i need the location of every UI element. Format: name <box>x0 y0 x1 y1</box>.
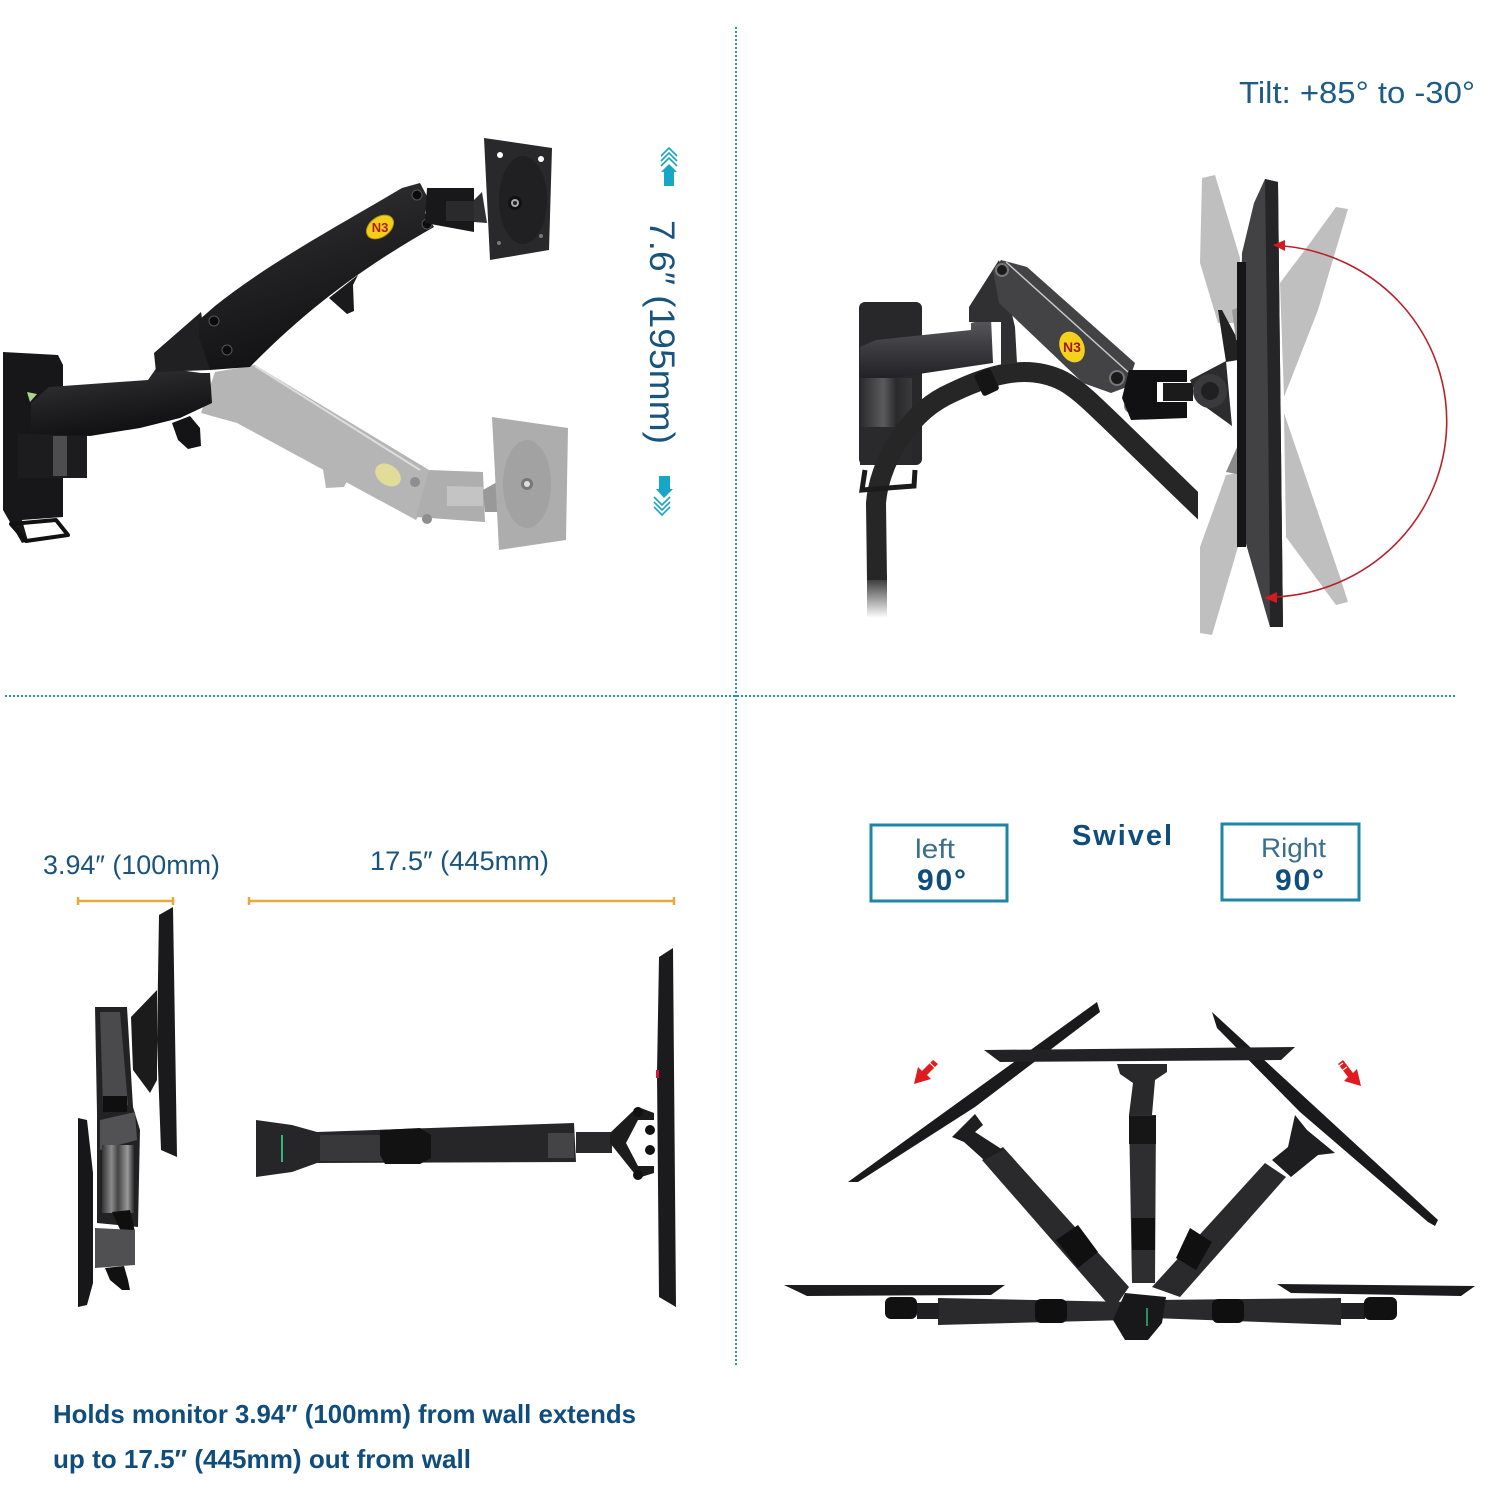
height arrow down <box>654 476 673 515</box>
lower arm <box>31 367 212 436</box>
panel: tilt <box>859 75 1475 635</box>
retracted monitor <box>157 907 177 1157</box>
support post <box>18 434 87 478</box>
arm screws <box>209 190 432 355</box>
extended pin <box>576 1132 612 1153</box>
bottom caption: up to 17.5″ (445mm) out from wall <box>53 1444 471 1474</box>
extended arm <box>256 1120 576 1177</box>
height arrow up <box>661 148 677 186</box>
retracted knob <box>105 1266 130 1290</box>
logo badge <box>1054 327 1090 367</box>
dimension line extension <box>249 897 674 905</box>
right swivel arrow <box>1336 1060 1361 1086</box>
strap <box>862 470 915 490</box>
arm tab <box>329 275 358 314</box>
elbow joint <box>969 260 1017 365</box>
left box <box>871 825 1007 901</box>
elbow joint <box>154 312 210 372</box>
panel: swivel <box>784 820 1475 1340</box>
right box <box>1222 824 1359 900</box>
adjustment knob <box>172 416 201 449</box>
retracted wall plate <box>78 1118 93 1307</box>
left swivel arrow <box>914 1059 940 1084</box>
bottom-left arm <box>885 1297 1129 1325</box>
wall plate <box>3 352 63 543</box>
logo badge: N3 <box>372 220 388 235</box>
bottom caption <box>53 1399 636 1474</box>
horizontal divider <box>5 695 1455 697</box>
monitor bracket <box>425 188 487 232</box>
retracted arm <box>95 1007 140 1238</box>
retracted bracket <box>131 990 157 1093</box>
forearm <box>993 260 1135 393</box>
red indicator <box>656 1070 659 1078</box>
dimension line wall <box>78 897 173 905</box>
swivel title: Swivel <box>1072 820 1172 852</box>
vertical divider <box>735 27 737 1365</box>
wall plate <box>859 302 922 465</box>
bracket <box>1122 370 1193 420</box>
base mount <box>1113 1293 1166 1340</box>
panel: extension <box>43 846 676 1474</box>
dimension label extension: 17.5″ (445mm) <box>370 846 549 876</box>
green indicator <box>27 392 37 402</box>
forearm screws <box>996 264 1137 412</box>
VESA plate <box>484 138 552 260</box>
bottom-right monitor <box>1277 1284 1475 1296</box>
ghost arm: lower position <box>201 365 568 550</box>
tilt arc <box>1275 246 1447 597</box>
logo badge: N3 <box>1063 339 1081 355</box>
ball joint <box>1190 361 1232 426</box>
VESA bracket <box>1218 306 1242 475</box>
monitor <box>1237 179 1283 627</box>
bottom caption: Holds monitor 3.94″ (100mm) from wall extends <box>53 1399 636 1429</box>
carry handle <box>11 520 68 541</box>
arrowhead bottom <box>1264 592 1277 603</box>
cable clip <box>973 367 1000 397</box>
center monitor <box>984 1047 1295 1062</box>
dimension label wall: 3.94″ (100mm) <box>43 850 220 880</box>
tilt label: Tilt: +85° to -30° <box>1239 75 1475 110</box>
center arm <box>1117 1064 1167 1283</box>
retracted base <box>95 1228 135 1268</box>
left-angled monitor <box>848 1002 1100 1182</box>
arrowhead top <box>1273 240 1285 251</box>
bottom-left monitor <box>784 1285 1005 1296</box>
bottom-right arm <box>1152 1297 1397 1325</box>
ghost monitors <box>1200 175 1348 635</box>
left box: left <box>915 834 956 864</box>
left box: 90° <box>917 864 966 897</box>
right box: 90° <box>1275 864 1324 897</box>
cable <box>876 372 1215 580</box>
right-angled monitor <box>1212 1012 1438 1226</box>
logo badge <box>362 210 398 244</box>
base indicator <box>1146 1308 1148 1326</box>
right-diagonal arm <box>1152 1115 1335 1297</box>
upper arm <box>199 183 434 370</box>
left-diagonal arm <box>952 1114 1129 1310</box>
support post <box>860 378 912 465</box>
cable fade <box>867 575 887 618</box>
right box: Right <box>1261 833 1327 863</box>
lower arm <box>860 318 993 378</box>
height label: 7.6″ (195mm) <box>642 220 681 444</box>
extended monitor <box>657 948 676 1307</box>
panel: height adjustment <box>3 138 681 550</box>
extended bracket <box>610 1107 655 1180</box>
